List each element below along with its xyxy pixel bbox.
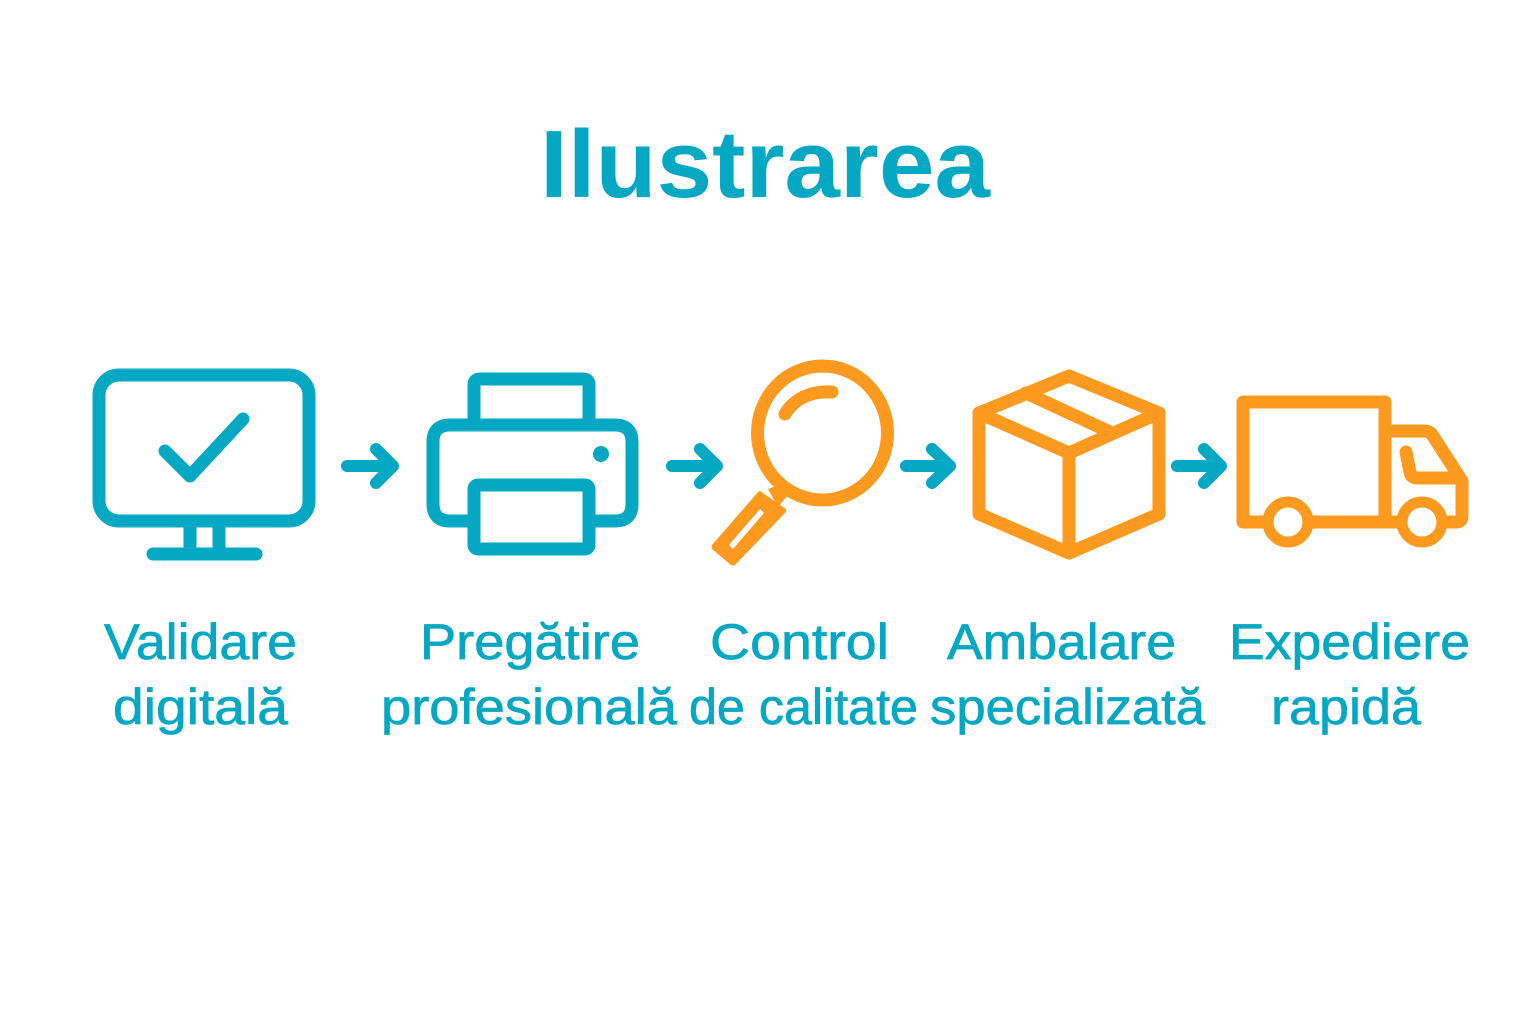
label: Validare digitală: Validare	[104, 614, 297, 670]
arrow 3	[906, 449, 950, 483]
label: Pregătire profesională	[381, 614, 677, 735]
label: Pregătire profesională: Pregătire	[420, 614, 640, 670]
label: Control de calitate: de calitate	[689, 679, 918, 735]
arrow 4	[1177, 449, 1221, 483]
label: Pregătire profesională: profesională	[381, 679, 677, 735]
label: Control de calitate	[689, 614, 918, 735]
label: Expediere rapidă: rapidă	[1271, 679, 1421, 735]
icon: magnifying glass	[712, 366, 888, 566]
icon: truck	[1243, 402, 1462, 542]
label: Ambalare specializată: specializată	[930, 679, 1205, 735]
icon: monitor with check	[99, 375, 309, 554]
arrow 1	[347, 449, 393, 483]
title: Ilustrarea	[540, 111, 991, 218]
label: Ambalare specializată	[930, 614, 1205, 735]
label: Validare digitală: digitală	[113, 679, 288, 735]
label: Validare digitală	[104, 614, 297, 735]
icon: box	[979, 376, 1159, 553]
icon: printer	[433, 379, 632, 549]
arrow 2	[672, 449, 717, 483]
label: Expediere rapidă	[1229, 614, 1470, 735]
label: Expediere rapidă: Expediere	[1229, 614, 1470, 670]
label: Control de calitate: Control	[710, 614, 889, 670]
label: Ambalare specializată: Ambalare	[947, 614, 1176, 670]
